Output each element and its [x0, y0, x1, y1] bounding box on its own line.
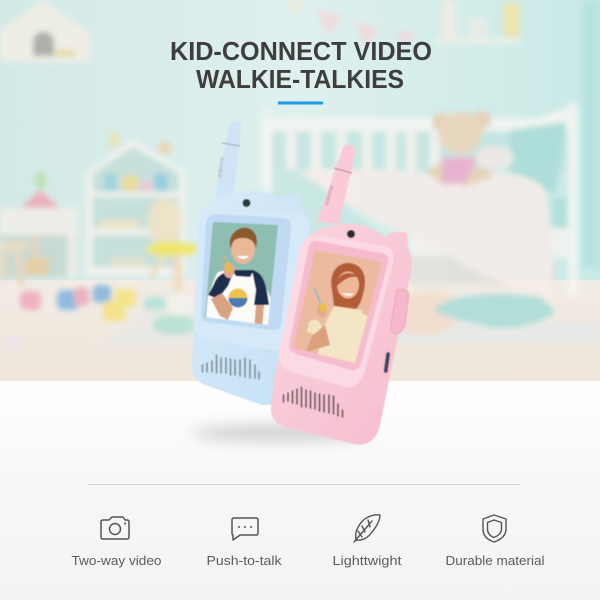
feature: two-way video — [72, 517, 162, 568]
pink screen — [292, 250, 382, 364]
blue walkie-talkie — [192, 121, 310, 405]
pink camera — [347, 230, 355, 238]
blue screen — [204, 222, 278, 326]
label: push-to-talk: Push-to-talk — [206, 553, 282, 568]
label: two-way video: Two-way video — [72, 553, 162, 568]
pink faceplate — [279, 235, 394, 387]
title: KID-CONNECT VIDEO — [170, 36, 432, 66]
title: WALKIE-TALKIES — [196, 64, 404, 94]
label: durable material: Durable material — [446, 553, 545, 568]
pink side button — [391, 290, 409, 334]
icon: feather — [354, 515, 380, 542]
title — [170, 36, 432, 94]
blue speaker grille — [202, 355, 259, 379]
label: lightweight: Lighttwight — [332, 553, 402, 568]
blue antenna: Antenna — [217, 156, 226, 178]
icon: shield — [483, 515, 506, 542]
blue body — [192, 191, 310, 405]
pink walkie-talkie — [271, 145, 412, 444]
divider — [88, 484, 520, 485]
icon: camera — [101, 517, 129, 539]
device shadow — [190, 424, 370, 442]
pink antenna — [317, 145, 356, 224]
pink antenna: Antenna — [324, 184, 335, 207]
pink speaker grille — [284, 387, 342, 417]
feature: lightweight — [332, 515, 402, 568]
pink side port — [383, 352, 390, 373]
pink body — [271, 224, 412, 444]
blue camera — [242, 199, 250, 207]
lower white panel — [0, 381, 600, 600]
blue antenna — [214, 121, 241, 205]
title accent line — [278, 102, 323, 104]
feature: durable material — [446, 515, 545, 568]
icon: speech bubble — [232, 518, 258, 540]
blue faceplate — [195, 210, 309, 350]
feature: push-to-talk — [206, 518, 282, 568]
background: blurred nursery scene — [0, 0, 600, 382]
